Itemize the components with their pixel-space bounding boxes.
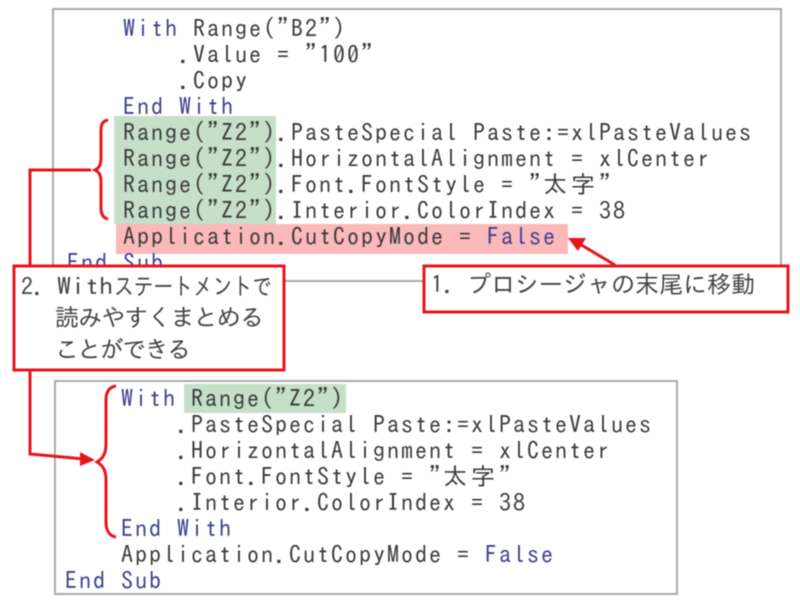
code text: upper listing: Application.CutCopyMode = False xyxy=(123,224,557,248)
callout 2: ことができる xyxy=(55,337,191,361)
code text: lower listing xyxy=(65,386,653,592)
highlight: green With target xyxy=(184,384,346,413)
code text: upper listing: End Sub xyxy=(67,250,165,274)
code text: lower listing: With Range("Z2") xyxy=(121,386,345,410)
code text: upper listing: End With xyxy=(123,94,235,118)
code text: upper listing: .Value = "100" xyxy=(179,42,375,66)
highlight: green Range cells xyxy=(114,116,276,224)
callout 2: 読みやすくまとめる xyxy=(55,305,264,329)
arrow: callout 1 to pink line xyxy=(568,238,615,265)
code text: upper listing: Range("Z2").HorizontalAlignment = xlCenter xyxy=(123,146,711,170)
code text: upper listing: Range("Z2").Interior.ColorIndex = 38 xyxy=(123,198,627,222)
panel: upper code listing xyxy=(53,9,781,281)
code text: lower listing: Application.CutCopyMode = False xyxy=(121,542,555,566)
code text: upper listing xyxy=(67,16,753,274)
highlight: pink CutCopyMode line xyxy=(116,224,568,254)
code text: lower listing: .HorizontalAlignment = xlCenter xyxy=(177,438,611,462)
code text: lower listing: .Font.FontStyle = "太字" xyxy=(177,464,513,488)
panel: lower code listing xyxy=(55,381,677,594)
callout 1: 1．プロシージャの末尾に移動 xyxy=(431,272,755,296)
icon: lower red brace xyxy=(97,386,116,537)
callout 2: With xyxy=(57,274,113,298)
arrow: callout 2 to lower brace xyxy=(30,370,95,466)
code text: lower listing: End With xyxy=(121,516,233,540)
code text: upper listing: Range("Z2").Font.FontStyle = "太字" xyxy=(123,172,613,196)
arrow: brace to callout 2 xyxy=(30,170,91,265)
code text: lower listing: End Sub xyxy=(65,568,163,592)
callout 2: 2． xyxy=(21,274,57,298)
code text: upper listing: Range("Z2").PasteSpecial Paste:=xlPasteValues xyxy=(123,120,753,144)
code text: upper listing: With Range("B2") xyxy=(123,16,347,40)
connector: grey line between callouts xyxy=(284,280,423,282)
code text: upper listing: .Copy xyxy=(179,68,249,92)
callout 1 xyxy=(424,266,788,312)
code text: lower listing: .PasteSpecial Paste:=xlPasteValues xyxy=(177,412,653,436)
callout 2 xyxy=(14,266,284,370)
icon: upper red brace xyxy=(95,120,108,219)
callout 2: ステートメントで xyxy=(114,274,272,298)
code text: lower listing: .Interior.ColorIndex = 38 xyxy=(177,490,527,514)
